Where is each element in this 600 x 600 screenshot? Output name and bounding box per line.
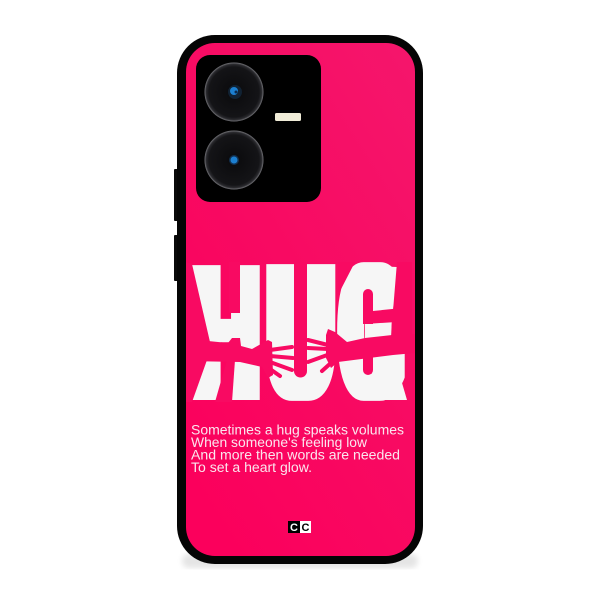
- lens: top: [204, 62, 264, 122]
- poem text: When someone's feeling low: [191, 435, 367, 450]
- logo: [288, 521, 311, 534]
- side buttons: [174, 169, 180, 281]
- letter H: H: [194, 223, 258, 443]
- poem text: Sometimes a hug speaks volumes: [191, 422, 404, 438]
- logo: C: [302, 522, 310, 534]
- arm and hand: right: [308, 329, 415, 371]
- shadow: [182, 554, 418, 568]
- poem text: [191, 422, 404, 475]
- case surface: [186, 43, 415, 556]
- camera module: [196, 55, 321, 202]
- lens: bottom: [204, 130, 264, 190]
- poem text: And more then words are needed: [191, 448, 400, 462]
- letter G: G: [342, 221, 401, 441]
- carved edges: [186, 262, 412, 402]
- poem text: To set a heart glow.: [191, 460, 312, 475]
- letter U: U: [269, 222, 333, 442]
- logo: C: [290, 522, 298, 534]
- HUG lettering: [186, 221, 415, 443]
- flash: [275, 113, 301, 121]
- phone frame: [177, 35, 423, 564]
- arm and hand: left: [186, 338, 293, 378]
- G flare fill: [365, 266, 407, 400]
